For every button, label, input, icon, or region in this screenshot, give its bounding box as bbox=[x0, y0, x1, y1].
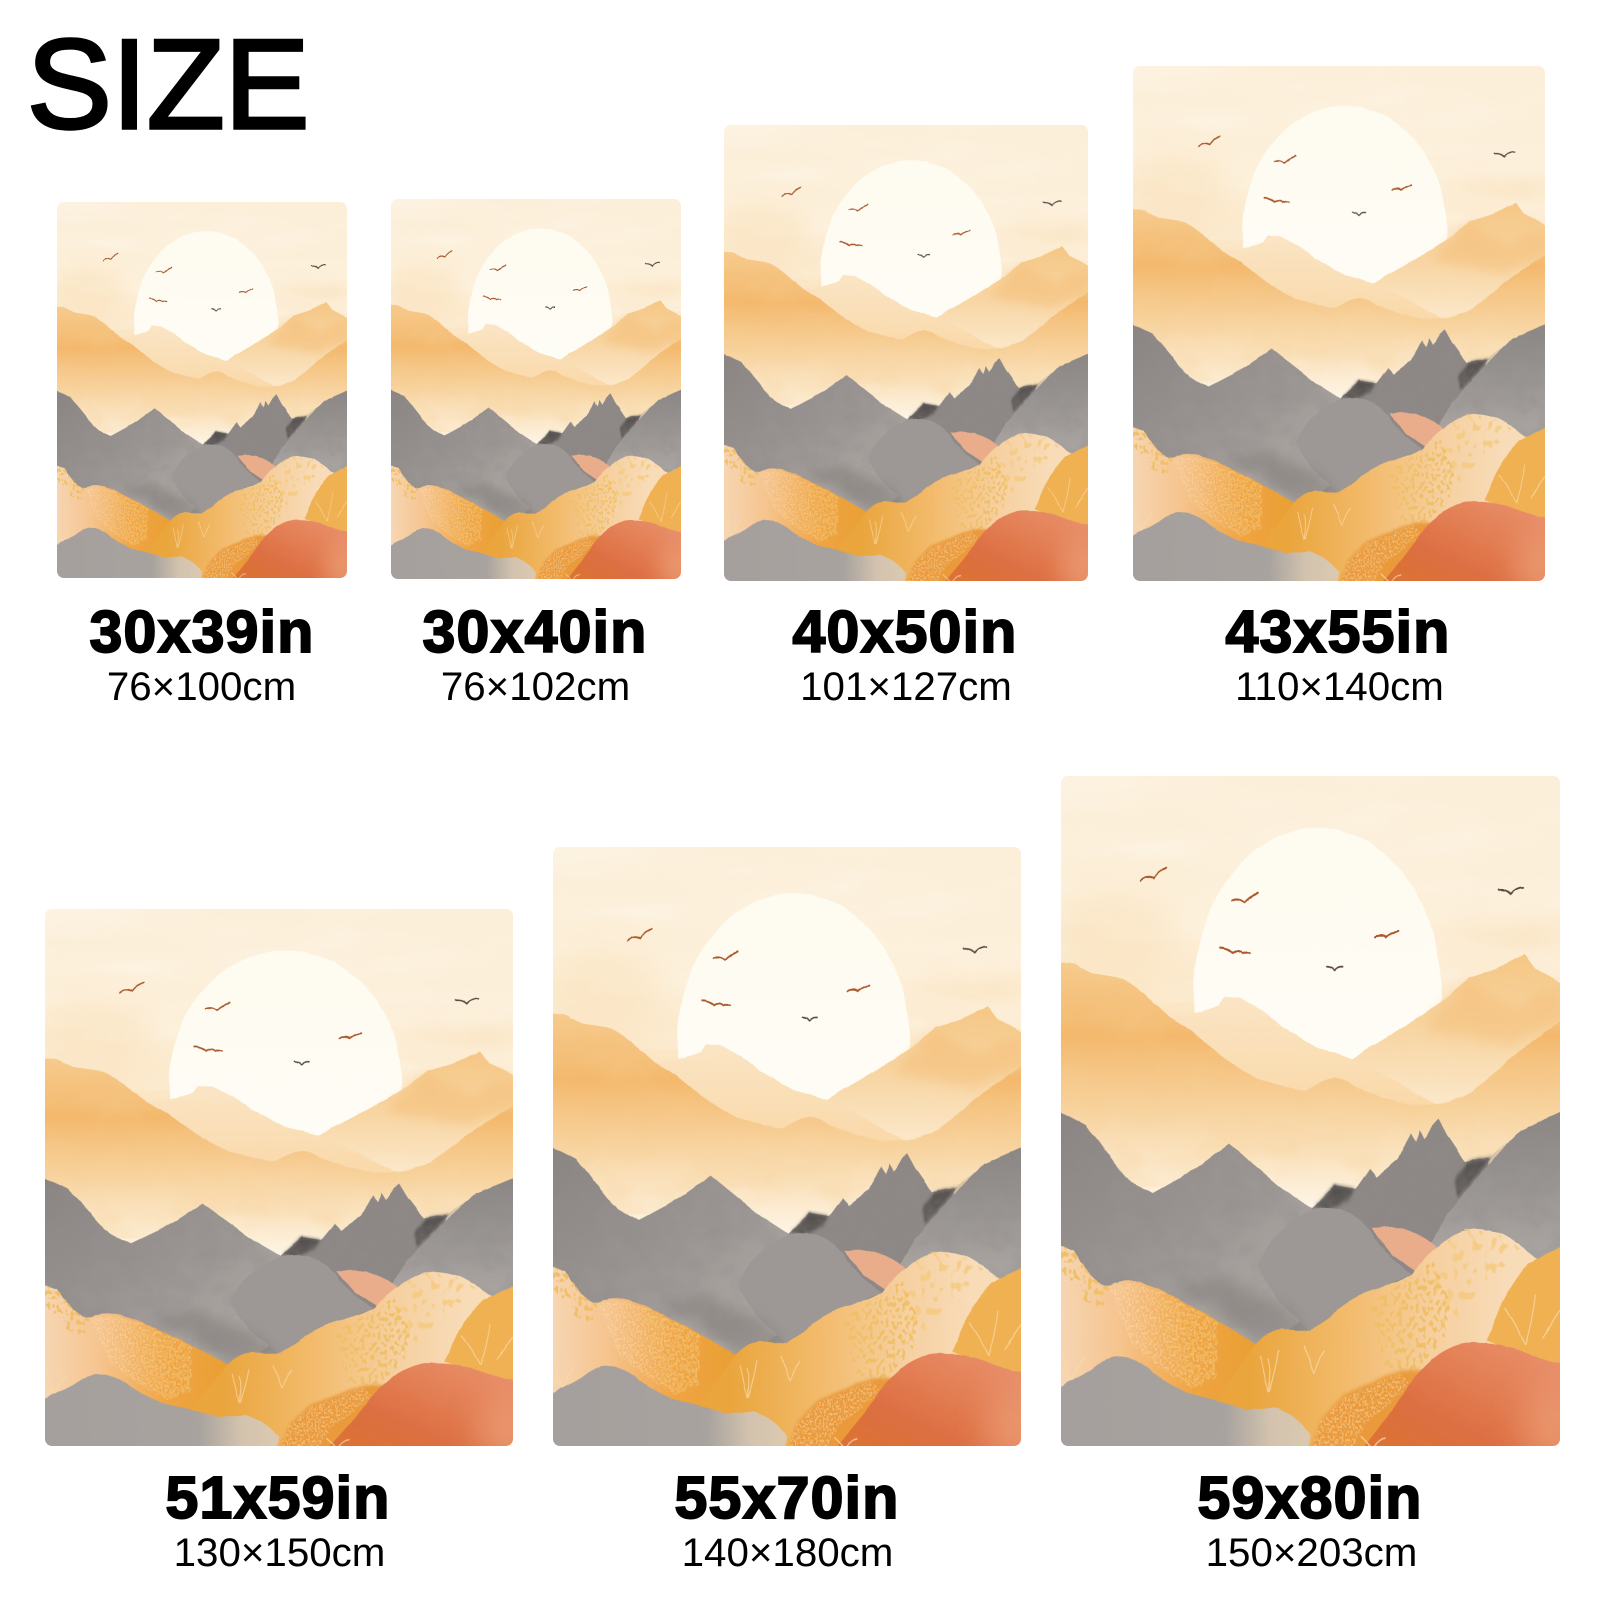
artwork: mountain landscape 59x80in bbox=[1061, 776, 1560, 1446]
label: 101×127cm: 101×127cm bbox=[800, 664, 1012, 709]
title: SIZE bbox=[27, 13, 309, 155]
label: 150×203cm: 150×203cm bbox=[1206, 1530, 1417, 1575]
label: 30x40in: 30x40in bbox=[423, 599, 647, 665]
artwork: mountain landscape 51x59in bbox=[45, 909, 513, 1446]
size option: 40x50in bbox=[724, 125, 1088, 709]
label: 76×100cm: 76×100cm bbox=[107, 664, 296, 709]
label: 76×102cm: 76×102cm bbox=[441, 664, 630, 709]
size option: 51x59in bbox=[45, 909, 513, 1575]
size option: 43x55in bbox=[1133, 66, 1545, 709]
label: 40x50in: 40x50in bbox=[793, 599, 1017, 665]
label: 140×180cm: 140×180cm bbox=[682, 1530, 893, 1575]
label: 30x39in: 30x39in bbox=[90, 599, 314, 665]
size option: 59x80in bbox=[1061, 776, 1560, 1575]
artwork: mountain landscape 30x40in bbox=[391, 199, 681, 579]
artwork: mountain landscape 40x50in bbox=[724, 125, 1088, 581]
label: 110×140cm: 110×140cm bbox=[1235, 664, 1444, 709]
artwork: mountain landscape 43x55in bbox=[1133, 66, 1545, 581]
label: 55x70in: 55x70in bbox=[675, 1465, 899, 1531]
size option: 30x40in bbox=[391, 199, 681, 709]
label: 130×150cm: 130×150cm bbox=[174, 1530, 385, 1575]
size option: 30x39in bbox=[57, 202, 347, 709]
label: 43x55in: 43x55in bbox=[1226, 599, 1450, 665]
label: 59x80in: 59x80in bbox=[1198, 1465, 1422, 1531]
size option: 55x70in bbox=[553, 847, 1021, 1575]
artwork: mountain landscape 55x70in bbox=[553, 847, 1021, 1446]
artwork: mountain landscape 30x39in bbox=[57, 202, 347, 578]
label: 51x59in: 51x59in bbox=[166, 1465, 390, 1531]
